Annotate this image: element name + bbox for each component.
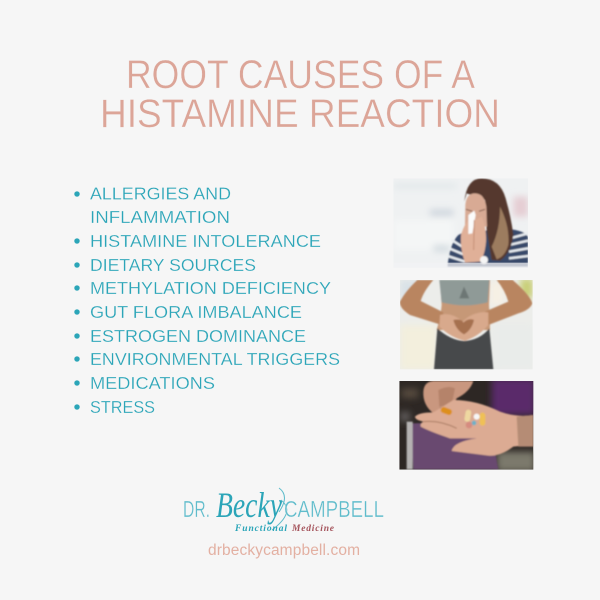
photo: hands forming heart on stomach: [400, 278, 533, 370]
bulleted list of root causes: GUT FLORA IMBALANCE: [90, 302, 302, 322]
title: [100, 53, 500, 136]
logo: Dr. Becky Campbell Functional Medicine: [183, 485, 384, 534]
bulleted list of root causes: METHYLATION DEFICIENCY: [90, 278, 331, 298]
bulleted list of root causes: INFLAMMATION: [90, 207, 230, 227]
bulleted list of root causes: STRESS: [90, 397, 155, 417]
bulleted list of root causes: ALLERGIES AND: [90, 184, 231, 204]
logo: Dr. Becky Campbell Functional Medicine: Medicine: [291, 524, 335, 534]
title: ROOT CAUSES OF A: [126, 53, 475, 97]
bulleted list of root causes: ESTROGEN DOMINANCE: [90, 326, 306, 346]
bulleted list of root causes: MEDICATIONS: [90, 373, 215, 393]
logo: Dr. Becky Campbell Functional Medicine: CAMPBELL: [284, 496, 384, 522]
logo: Dr. Becky Campbell Functional Medicine: Becky: [216, 485, 282, 525]
bulleted list of root causes: [74, 184, 340, 417]
bulleted list of root causes: ENVIRONMENTAL TRIGGERS: [90, 349, 340, 369]
website url: drbeckycampbell.com: [208, 542, 360, 559]
photo: hand holding pills: [399, 378, 535, 472]
logo: Dr. Becky Campbell Functional Medicine: Functional: [234, 524, 287, 534]
logo: Dr. Becky Campbell Functional Medicine: DR.: [183, 496, 210, 522]
bulleted list of root causes: DIETARY SOURCES: [90, 255, 256, 275]
photo: woman sneezing into tissue: [393, 178, 528, 268]
title: HISTAMINE REACTION: [100, 92, 500, 136]
bulleted list of root causes: HISTAMINE INTOLERANCE: [90, 231, 321, 251]
